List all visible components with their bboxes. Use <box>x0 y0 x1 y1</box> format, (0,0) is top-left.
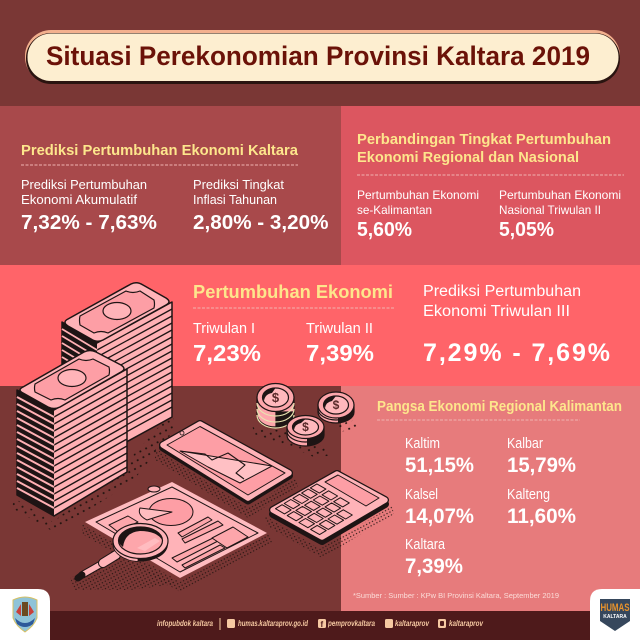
stat: kalsel: Kalsel <box>405 487 438 503</box>
footer: facebook: f <box>320 620 324 629</box>
heading: Ekonomi Regional dan Nasional <box>357 150 579 166</box>
panel: pertumbuhan ekonomi band <box>0 265 640 386</box>
stat: akumulatif: Prediksi Pertumbuhan <box>21 178 147 192</box>
footer: facebook: pemprovkaltara <box>327 618 375 628</box>
stat: nasional: Pertumbuhan Ekonomi <box>499 188 621 202</box>
stat: inflasi: Inflasi Tahunan <box>193 193 277 207</box>
title text: Situasi Perekonomian Provinsi Kaltara 2019 <box>46 41 590 71</box>
illustration: calculator <box>273 474 385 541</box>
illustration: front money stack <box>17 350 127 516</box>
pie chart <box>139 498 193 526</box>
illustration: smartphone with chart <box>163 424 289 500</box>
stat: triwulan II: Triwulan II <box>306 320 373 337</box>
stat: triwulan I <box>193 320 261 366</box>
stat: kalteng: Kalteng <box>507 487 550 503</box>
stat: kalbar: Kalbar <box>507 436 543 452</box>
stat: kalbar <box>507 436 576 477</box>
stat: kalimantan <box>357 188 479 241</box>
stat: inflasi <box>193 178 329 234</box>
logo: humas kaltara shield: HUMAS <box>600 602 630 614</box>
footer: website <box>227 618 309 628</box>
stat: nasional: 5,05% <box>499 219 554 241</box>
footer bar <box>0 611 640 640</box>
logo: humas kaltara shield <box>590 589 640 640</box>
stat: inflasi: Prediksi Tingkat <box>193 178 285 192</box>
illustration: coin stack middle: $ <box>302 420 309 434</box>
stat: kaltim: Kaltim <box>405 436 440 452</box>
stat: prediksi triwulan III: Ekonomi Triwulan III <box>423 303 570 320</box>
footer: instagram: kaltaraprov <box>449 618 484 628</box>
stat: kaltara: 7,39% <box>405 555 463 578</box>
source note: *Sumber : Sumber : KPw BI Provinsi Kaltara, September 2019 <box>353 591 559 600</box>
stat: triwulan II <box>306 320 374 366</box>
illustration: coin stack left <box>257 384 294 428</box>
stat: akumulatif <box>21 178 157 234</box>
stat: kalteng <box>507 487 576 528</box>
stat: kalsel: 14,07% <box>405 505 474 528</box>
stat: triwulan I: 7,23% <box>193 340 261 366</box>
panel: perbandingan regional dan nasional <box>341 106 640 265</box>
heading <box>357 132 611 166</box>
stat: prediksi triwulan III <box>423 283 610 367</box>
illustration: magnifying glass <box>78 524 168 578</box>
stat: kalsel <box>405 487 474 528</box>
footer: infopublik: infopubdok kaltara <box>157 618 213 628</box>
stat: prediksi triwulan III: 7,29% - 7,69% <box>423 339 610 367</box>
footer: twitter <box>385 618 430 628</box>
stat: kalbar: 15,79% <box>507 454 576 477</box>
stat: kaltara: Kaltara <box>405 537 446 553</box>
panel: prediksi pertumbuhan ekonomi kaltara <box>0 106 341 265</box>
heading: Pertumbuhan Ekonomi <box>193 282 393 302</box>
stat: kalteng: 11,60% <box>507 505 576 528</box>
stat: akumulatif: Ekonomi Akumulatif <box>21 193 138 207</box>
heading: Perbandingan Tingkat Pertumbuhan <box>357 132 611 148</box>
footer: twitter: kaltaraprov <box>395 618 430 628</box>
illustration: coin stack middle <box>287 416 324 446</box>
illustration: back money stack <box>62 283 172 458</box>
title banner <box>25 30 620 84</box>
stat: triwulan II: 7,39% <box>306 340 374 366</box>
illustration: coin stack right <box>318 392 354 423</box>
stat: kalimantan: 5,60% <box>357 219 412 241</box>
footer: facebook <box>318 618 375 629</box>
stat: nasional: Nasional Triwulan II <box>499 203 601 217</box>
stat: prediksi triwulan III: Prediksi Pertumbuhan <box>423 283 581 300</box>
stat: nasional <box>499 188 621 241</box>
stat: kalimantan: Pertumbuhan Ekonomi <box>357 188 479 202</box>
illustration: report document with pie chart <box>85 482 267 578</box>
panel: pangsa ekonomi regional kalimantan <box>341 386 640 611</box>
logo: humas kaltara shield: KALTARA <box>603 614 627 620</box>
stat: kaltim: 51,15% <box>405 454 474 477</box>
stat: inflasi: 2,80% - 3,20% <box>193 212 329 234</box>
stat: triwulan I: Triwulan I <box>193 320 255 337</box>
stat: kaltim <box>405 436 474 477</box>
footer: instagram <box>438 618 484 628</box>
illustration: coin stack left: $ <box>272 390 280 405</box>
footer: website: humas.kaltaraprov.go.id <box>238 618 309 628</box>
illustration: coin stack right: $ <box>333 398 340 412</box>
heading: Pangsa Ekonomi Regional Kalimantan <box>377 399 622 415</box>
stat: kaltara <box>405 537 463 578</box>
stat: kalimantan: se-Kalimantan <box>357 203 432 217</box>
illustration: halftone shadows <box>12 412 394 592</box>
data rows <box>109 516 248 568</box>
stat: akumulatif: 7,32% - 7,63% <box>21 212 157 234</box>
logo: provinsi kaltara crest <box>0 589 50 640</box>
heading: Prediksi Pertumbuhan Ekonomi Kaltara <box>21 143 299 159</box>
